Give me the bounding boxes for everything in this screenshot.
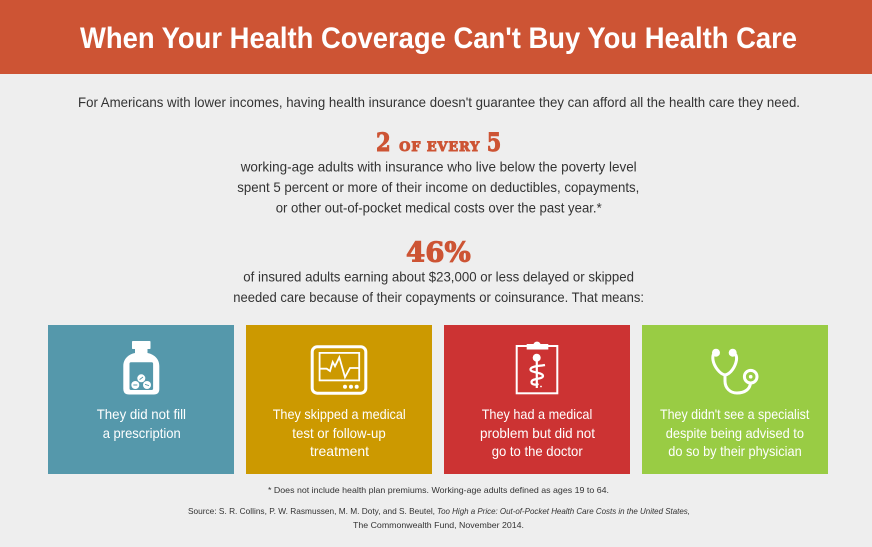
text: 2 of every 5 description: spent 5 percent or more of their income on deductibles, copayments,	[237, 179, 639, 195]
panel text: They didn't see a specialist	[660, 406, 809, 422]
panel text: test or follow-up	[292, 425, 386, 441]
panel text	[480, 406, 595, 459]
icon: clipboard with medical staff	[517, 342, 557, 393]
panel text: a prescription	[103, 425, 181, 441]
statistic: 2 of every 5: OF EVERY	[399, 139, 480, 154]
panel text: treatment	[310, 443, 369, 459]
statistic: 46%: 46%	[406, 238, 471, 269]
text: 46% description	[233, 269, 644, 305]
title banner	[0, 0, 872, 74]
text: 46% description: needed care because of their copayments or coinsurance. That means:	[233, 289, 644, 305]
panel text	[660, 406, 809, 459]
text: 2 of every 5 description: working-age adults with insurance who live below the poverty level	[240, 159, 637, 175]
panel text: go to the doctor	[492, 443, 583, 459]
panel: prescription	[48, 325, 234, 474]
panel: did not see doctor	[444, 325, 630, 474]
title: When Your Health Coverage Can't Buy You Health Care	[80, 22, 797, 55]
text: 2 of every 5 description	[237, 159, 639, 215]
statistic: 2 of every 5	[376, 128, 501, 158]
text: 2 of every 5 description: or other out-of-pocket medical costs over the past year.*	[276, 199, 602, 215]
panel text: problem but did not	[480, 425, 595, 441]
intro text: For Americans with lower incomes, having health insurance doesn't guarantee they can afford all the health care they need.	[78, 94, 800, 110]
panel text: They did not fill	[97, 406, 186, 422]
panel text	[97, 406, 186, 441]
panel: specialist	[642, 325, 828, 474]
icon: heart monitor	[312, 347, 366, 393]
source citation	[188, 506, 690, 530]
statistic: 2 of every 5: 5	[487, 128, 501, 158]
panel text: They skipped a medical	[273, 406, 406, 422]
source citation: Source: S. R. Collins, P. W. Rasmussen, M. M. Doty, and S. Beutel,	[188, 506, 435, 516]
icon: pill bottle	[123, 341, 159, 394]
statistic: 2 of every 5: 2	[376, 128, 391, 158]
panel: medical test	[246, 325, 432, 474]
panel text: They had a medical	[482, 406, 592, 422]
panel text	[273, 406, 406, 459]
source citation: The Commonwealth Fund, November 2014.	[353, 520, 524, 530]
footnote: * Does not include health plan premiums. Working-age adults defined as ages 19 to 64.	[268, 485, 609, 495]
icon: stethoscope	[712, 349, 757, 393]
panel text: despite being advised to	[666, 425, 804, 441]
panel text: do so by their physician	[668, 443, 802, 459]
source citation: Too High a Price: Out-of-Pocket Health Care Costs in the United States,	[437, 506, 690, 516]
text: 46% description: of insured adults earning about $23,000 or less delayed or skipped	[243, 269, 634, 285]
